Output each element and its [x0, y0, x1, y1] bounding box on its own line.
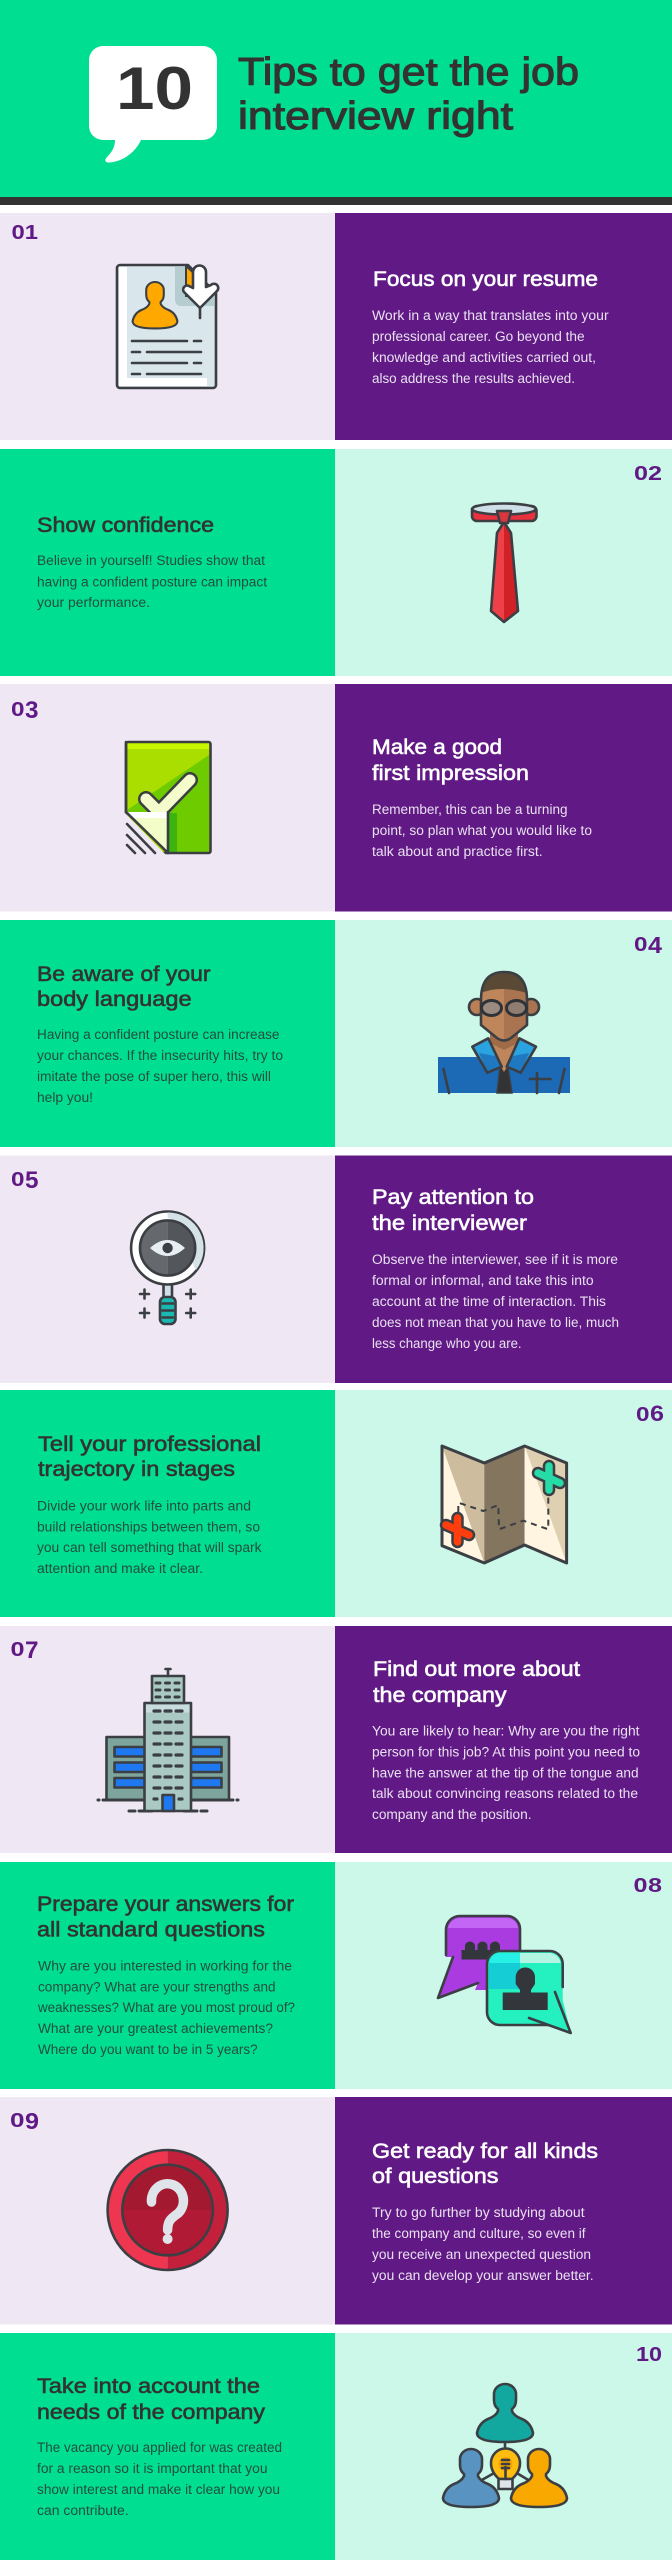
text: show confidence: Believe in yourself! Studies show that	[37, 553, 265, 569]
text: take into account the needs: show interest and make it clear how you	[37, 2482, 280, 2498]
text: find out more about the company	[372, 1657, 640, 1823]
icon: folded map	[442, 1446, 567, 1563]
icon: resume	[117, 265, 218, 388]
text: be aware of your body language: body language	[37, 987, 192, 1011]
text: find out more about the company: Find out more about	[373, 1657, 580, 1681]
text: focus on your resume: knowledge and activities carried out,	[372, 350, 596, 366]
text: get ready for all kinds of questions: Try to go further by studying about	[372, 2205, 585, 2221]
text: show confidence: your performance.	[37, 595, 150, 611]
text: tell your professional trajectory: Tell your professional	[38, 1432, 261, 1456]
icon: question mark badge	[108, 2150, 228, 2270]
text: find out more about the company: company and the position.	[372, 1807, 532, 1823]
panel: tip 01	[0, 213, 672, 440]
text: make a good first impression: talk about and practice first.	[372, 844, 543, 860]
number 06	[636, 1401, 664, 1426]
text: be aware of your body language: Having a confident posture can increase	[37, 1027, 280, 1043]
text: get ready for all kinds of questions: Get ready for all kinds	[372, 2139, 598, 2163]
text: find out more about the company: have the answer at the tip of the tongue and	[372, 1766, 639, 1782]
text: pay attention to the interviewer: account at the time of interaction. This	[372, 1294, 606, 1310]
panel: header	[0, 0, 672, 205]
text: take into account the needs: The vacancy you applied for was created	[37, 2440, 282, 2456]
text: pay attention to the interviewer: does not mean that you have to lie, much	[372, 1315, 619, 1331]
text: be aware of your body language: help you!	[37, 1090, 93, 1106]
text: get ready for all kinds of questions	[372, 2139, 598, 2284]
panel: tip 03	[0, 684, 672, 912]
text: be aware of your body language: imitate the pose of super hero, this will	[37, 1069, 271, 1085]
number 07: 7	[25, 1637, 38, 1664]
icon: speech bubble with number 10	[89, 46, 217, 162]
number 07	[10, 1637, 38, 1664]
panel: tip 04	[0, 920, 672, 1147]
text: prepare your answers	[37, 1892, 295, 2058]
panel: tip 10	[0, 2333, 672, 2560]
text: tell your professional trajectory: trajectory in stages	[38, 1457, 235, 1481]
text: find out more about the company: person for this job? At this point you need to	[372, 1744, 640, 1760]
panel: tip 05	[0, 1156, 672, 1383]
text: show confidence: having a confident posture can impact	[37, 574, 267, 590]
panel: tip 02	[0, 449, 672, 676]
text: show confidence	[37, 513, 267, 611]
text: pay attention to the interviewer: formal or informal, and take this into	[372, 1273, 594, 1289]
number 05	[11, 1167, 38, 1194]
number 08: 0	[634, 1875, 648, 1897]
panel: tip 09	[0, 2097, 672, 2324]
number 05: 5	[25, 1167, 38, 1194]
text: focus on your resume: also address the results achieved.	[372, 371, 575, 387]
icon: speech bubble with number 10: 10	[116, 55, 193, 122]
text: take into account the needs	[37, 2374, 282, 2519]
text: take into account the needs: for a reason so it is important that you	[37, 2461, 268, 2477]
text: find out more about the company: talk about convincing reasons related to the	[372, 1786, 638, 1802]
text: focus on your resume: Focus on your resume	[373, 267, 598, 291]
panel: tip 07	[0, 1626, 672, 1853]
text: get ready for all kinds of questions: of questions	[372, 2164, 498, 2188]
text: pay attention to the interviewer: less change who you are.	[372, 1336, 522, 1352]
title: interview right	[238, 95, 513, 138]
text: get ready for all kinds of questions: you can develop your answer better.	[372, 2268, 594, 2284]
text: prepare your answers: Where do you want to be in 5 years?	[38, 2042, 258, 2058]
text: be aware of your body language: your chances. If the insecurity hits, try to	[37, 1048, 283, 1064]
text: pay attention to the interviewer: Pay attention to	[372, 1185, 534, 1209]
number 06: 0	[636, 1404, 650, 1426]
number 04: 4	[648, 932, 662, 958]
text: make a good first impression	[372, 735, 592, 860]
number 01: 01	[12, 222, 38, 244]
number 02: 02	[634, 463, 662, 485]
text: take into account the needs: Take into account the	[37, 2374, 260, 2398]
text: take into account the needs: needs of the company	[37, 2400, 265, 2424]
text: prepare your answers: company? What are your strengths and	[38, 1980, 276, 1996]
text: take into account the needs: can contribute.	[37, 2503, 129, 2519]
text: prepare your answers: Why are you interested in working for the	[38, 1958, 292, 1974]
icon: office building	[98, 1669, 238, 1811]
icon: checkmark page	[124, 742, 210, 855]
text: make a good first impression: point, so plan what you would like to	[372, 823, 592, 839]
number 08: 8	[648, 1875, 662, 1897]
text: prepare your answers: weaknesses? What are you most proud of?	[37, 2000, 295, 2016]
number 06: 6	[650, 1401, 664, 1426]
number 04: 0	[634, 934, 648, 956]
number 03	[11, 697, 38, 724]
text: make a good first impression: Make a good	[372, 735, 502, 759]
text: prepare your answers: all standard questions	[37, 1918, 265, 1942]
number 10: 10	[636, 2344, 662, 2366]
text: be aware of your body language	[37, 962, 283, 1106]
text: tell your professional trajectory: build relationships between them, so	[37, 1520, 260, 1536]
number 08	[634, 1875, 662, 1897]
text: prepare your answers: What are your greatest achievements?	[38, 2021, 273, 2037]
text: get ready for all kinds of questions: the company and culture, so even if	[372, 2226, 586, 2242]
text: show confidence: Show confidence	[37, 513, 214, 537]
text: pay attention to the interviewer: the interviewer	[372, 1211, 527, 1235]
text: focus on your resume: Work in a way that translates into your	[372, 308, 609, 324]
text: tell your professional trajectory: you can tell something that will spark	[37, 1540, 262, 1556]
text: tell your professional trajectory: attention and make it clear.	[37, 1561, 203, 1577]
text: make a good first impression: first impression	[372, 761, 529, 785]
icon: magnifier with eye	[131, 1212, 204, 1324]
text: tell your professional trajectory	[37, 1432, 262, 1577]
text: pay attention to the interviewer	[372, 1185, 619, 1352]
number 09	[10, 2108, 39, 2134]
number 09: 0	[10, 2110, 24, 2132]
text: tell your professional trajectory: Divide your work life into parts and	[37, 1498, 251, 1514]
number 07: 0	[10, 1639, 24, 1661]
number 03: 3	[25, 697, 38, 724]
text: focus on your resume	[372, 267, 609, 387]
title	[238, 51, 579, 138]
panel: tip 06	[0, 1390, 672, 1617]
number 03: 0	[11, 699, 24, 721]
icon: man with glasses	[438, 972, 570, 1093]
text: make a good first impression: Remember, this can be a turning	[372, 802, 568, 818]
number 04	[634, 932, 662, 958]
text: get ready for all kinds of questions: you receive an unexpected question	[372, 2247, 591, 2263]
text: pay attention to the interviewer: Observe the interviewer, see if it is more	[372, 1252, 618, 1268]
icon: necktie	[472, 504, 536, 622]
text: be aware of your body language: Be aware of your	[37, 962, 210, 986]
icon: chat bubbles	[438, 1916, 571, 2033]
text: prepare your answers: Prepare your answers for	[37, 1892, 294, 1916]
text: focus on your resume: professional career. Go beyond the	[372, 329, 585, 345]
number 09: 9	[25, 2108, 39, 2134]
title: Tips to get the job	[238, 51, 579, 94]
icon: team around light bulb	[443, 2384, 567, 2507]
number 05: 0	[11, 1169, 24, 1191]
text: find out more about the company: You are likely to hear: Why are you the right	[372, 1724, 640, 1740]
panel: tip 08	[0, 1862, 672, 2089]
text: find out more about the company: the company	[373, 1683, 507, 1707]
